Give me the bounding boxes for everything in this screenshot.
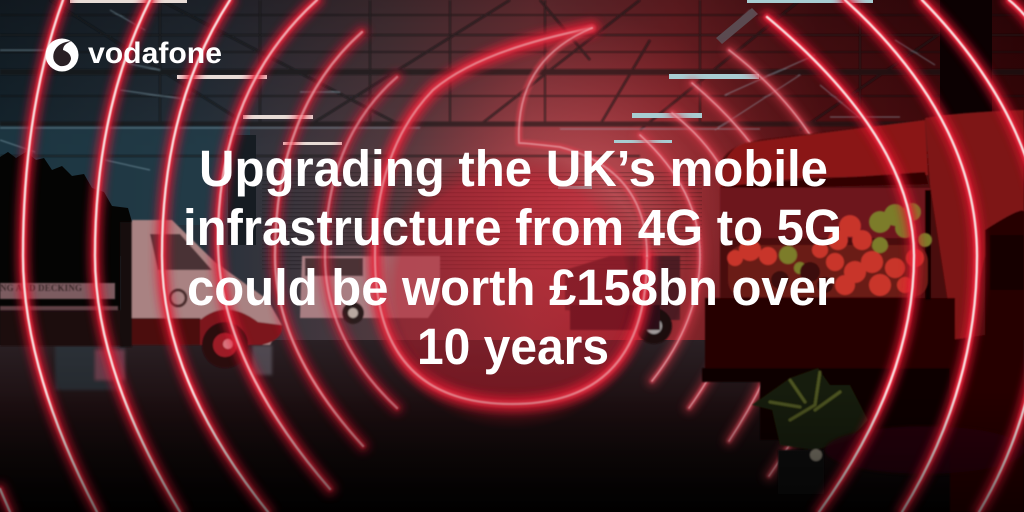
headline: infrastructure from 4G to 5G: [183, 199, 842, 256]
tree: [0, 152, 132, 345]
headline: 10 years: [417, 318, 609, 375]
flatbed van: NG AND DECKING: [0, 283, 82, 293]
headline: Upgrading the UK’s mobile: [199, 140, 828, 197]
logo: vodafone: [46, 37, 222, 72]
background vehicles: [300, 256, 680, 344]
floor reflections: [55, 345, 272, 390]
potted plant: [752, 368, 868, 494]
central glow: [360, 150, 664, 430]
flatbed van: [0, 220, 282, 368]
pillar: [940, 0, 992, 115]
headline: [183, 140, 842, 375]
rings behind truck: [640, 50, 850, 476]
strong arc: tip, left and bottom: [375, 28, 647, 404]
flowers: [727, 203, 932, 297]
flower truck: [702, 110, 1024, 512]
floor: [0, 340, 1024, 512]
icon: speech mark: [46, 38, 78, 72]
central speech mark ring: [375, 28, 647, 404]
wordmark: vodafone: [88, 37, 222, 70]
dark flower bed: [825, 426, 1024, 474]
bottom fade: [0, 390, 1024, 512]
faded arc: inner return to tip: [519, 28, 647, 256]
headline: could be worth £158bn over: [187, 259, 835, 316]
